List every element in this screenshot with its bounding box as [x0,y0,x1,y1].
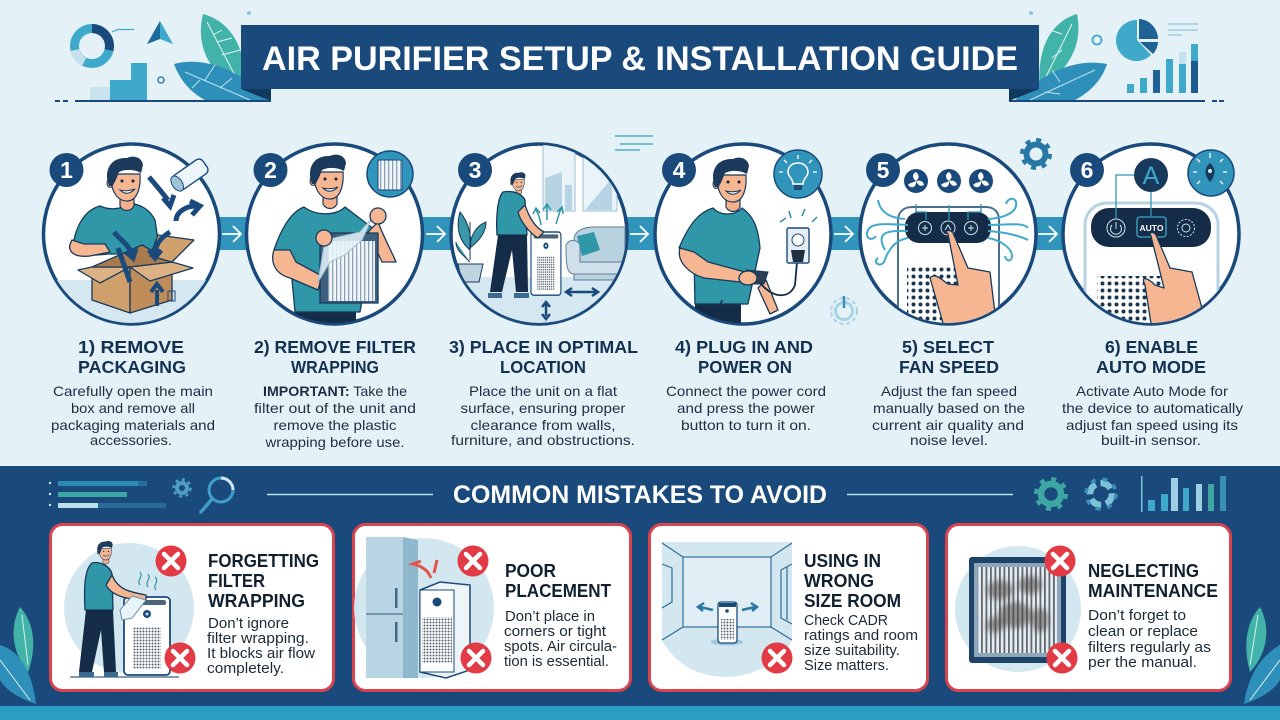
heading: PLACEMENT [505,580,612,601]
decoration: lines near step 3 [615,136,653,150]
text: ratings and room [804,628,918,644]
heading: WRAPPING [208,590,305,611]
text: step 1 description: box and remove all [71,400,195,416]
illustration circle: plugging in [655,144,831,333]
card: forgetting filter wrapping [50,524,334,690]
text: filter wrapping. [207,631,309,647]
text: spots. Air circula- [504,639,617,655]
text: Size matters. [804,658,889,674]
text [804,613,918,674]
illustration circle: placing unit in room [440,143,640,327]
step 4 [655,144,831,433]
text: step 4 description: and press the power [677,400,815,416]
text: It blocks air flow [207,646,316,662]
heading [208,550,319,611]
text: Don’t ignore [208,616,289,632]
heading: step 3 [449,337,638,377]
text: Don’t place in [505,609,595,625]
text: step 3 description: surface, ensuring proper [460,400,626,416]
heading: step 6: 6) ENABLE [1105,337,1198,357]
heading: FORGETTING [208,550,319,571]
number badge 5 [866,153,900,187]
icon: X bottom [460,642,492,674]
heading: WRONG [804,570,874,591]
heading: step 6: AUTO MODE [1096,357,1206,377]
panel: common mistakes background [0,466,1280,706]
heading: step 5: FAN SPEED [899,357,999,377]
heading [505,560,612,601]
illustration circle: auto mode [1063,144,1239,330]
card: neglecting maintenance [946,524,1230,690]
heading: SIZE ROOM [804,590,901,611]
number badge 2 [254,153,288,187]
text: step 6 description [1062,383,1243,448]
text: tion is essential. [504,654,609,670]
text: step 3 description: clearance from walls, [470,417,616,433]
decoration: top-right charts and leaves [1009,11,1224,102]
heading: NEGLECTING [1088,560,1199,581]
icon: X top [458,546,488,576]
decoration: bottom-left leaves [0,607,36,704]
icon: X top [156,546,186,576]
heading: step 3: 3) PLACE IN OPTIMAL [449,337,638,357]
decoration: top-left charts and leaves [55,11,271,102]
text [207,616,316,677]
icon: gear between steps 5 and 6 [1022,140,1050,168]
number badge 5: 5 [877,157,890,183]
number badge 4 [662,153,696,187]
illustration: purifier beside fridge [354,537,494,678]
illustration circle: auto mode: AUTO [1140,223,1164,233]
text: step 1 description: packaging materials and [51,417,215,433]
illustration circle: auto mode: A [1143,162,1160,190]
text: step 1 description [51,383,215,448]
text: step 6 description: the device to automatically [1062,400,1243,416]
section heading with rules: COMMON MISTAKES TO AVOID [453,481,827,509]
text: step 4 description: button to turn it on. [681,417,811,433]
number badge 4: 4 [673,157,686,183]
number badge 1 [50,153,84,187]
text: completely. [207,661,284,677]
card: using in wrong size room [650,524,928,690]
number badge 6: 6 [1081,157,1093,183]
heading: step 4: POWER ON [698,357,792,377]
illustration: dirty filter [955,546,1081,672]
text: step 2 description: wrapping before use. [264,434,404,450]
step 5 [860,144,1036,448]
heading: POOR [505,560,556,581]
text: step 6 description: Activate Auto Mode for [1076,383,1228,399]
text: step 1 description: accessories. [90,432,172,448]
title banner: AIR PURIFIER SETUP & INSTALLATION GUIDE [262,40,1018,78]
step 1 [40,144,220,448]
text: clean or replace [1088,624,1198,640]
step 6 [1062,144,1243,448]
heading: step 5: 5) SELECT [902,337,994,357]
number badge 6 [1070,153,1104,187]
text: step 3 description: furniture, and obstructions. [451,432,635,448]
card: poor placement [354,524,630,690]
text: step 2 description [254,383,416,450]
text: step 2 description: IMPORTANT: Take the [263,383,407,399]
number badge 3 [458,153,492,187]
icon: X bottom [1046,642,1078,674]
text [1088,608,1211,671]
connector band between steps [215,217,1065,250]
text: Don’t forget to [1088,608,1186,624]
text [504,609,617,670]
illustration: person unwrapping purifier [64,541,194,677]
number badge 1: 1 [60,157,73,183]
text: filters regularly as [1088,640,1211,656]
heading: MAINTENANCE [1088,580,1218,601]
text: Check CADR [804,613,888,629]
text: corners or tight [504,624,606,640]
decoration: right gears and bars [1036,476,1226,512]
text: step 1 description: Carefully open the main [53,383,213,399]
icon: X top [1044,546,1076,576]
heading: USING IN [804,550,881,571]
number badge 3: 3 [469,157,481,183]
text: step 6 description: adjust fan speed using its [1066,417,1238,433]
text: step 4 description [666,383,826,433]
heading: step 6 [1096,337,1206,377]
text: step 5 description: manually based on the [873,400,1025,416]
heading: step 4: 4) PLUG IN AND [675,337,813,357]
decoration: left status bars and magnifier [49,478,233,512]
heading [1088,560,1218,601]
heading: step 2 [254,337,416,377]
text: step 4 description: Connect the power cord [666,383,826,399]
illustration: small purifier in large room [662,542,792,677]
icon: power symbol below step 4 [831,296,857,324]
text: step 2 description: filter out of the unit and [254,400,416,416]
heading: step 1: 1) REMOVE [78,337,184,357]
text: step 6 description: built-in sensor. [1101,432,1201,448]
illustration circle: fan speed [860,144,1036,330]
illustration circle: unpacking box [40,144,220,330]
heading: step 1 [78,337,186,377]
text: per the manual. [1088,655,1197,671]
heading: step 2: 2) REMOVE FILTER [254,337,416,357]
footer band [0,706,1280,720]
text: size suitability. [804,643,900,659]
title banner [241,25,1039,101]
heading: step 1: PACKAGING [78,357,186,377]
text: step 5 description: current air quality and [872,417,1024,433]
text: step 5 description: Adjust the fan speed [881,383,1017,399]
text: step 5 description [872,383,1025,448]
text: step 3 description [451,383,635,448]
heading: step 5 [899,337,999,377]
heading: step 4 [675,337,813,377]
heading: FILTER [208,570,265,591]
text: step 3 description: Place the unit on a flat [469,383,617,399]
icon: X bottom [164,642,196,674]
number badge 2: 2 [264,157,277,183]
decoration: bottom-right leaves [1244,607,1280,704]
heading: step 2: WRAPPING [291,357,379,377]
heading [804,550,901,611]
step 3 [440,143,640,448]
text: step 5 description: noise level. [910,432,988,448]
text: step 2 description: remove the plastic [274,417,396,433]
icon: X [762,642,792,674]
illustration circle: removing wrap from filter [246,144,422,330]
heading: step 3: LOCATION [500,357,586,377]
step 2 [246,144,422,450]
